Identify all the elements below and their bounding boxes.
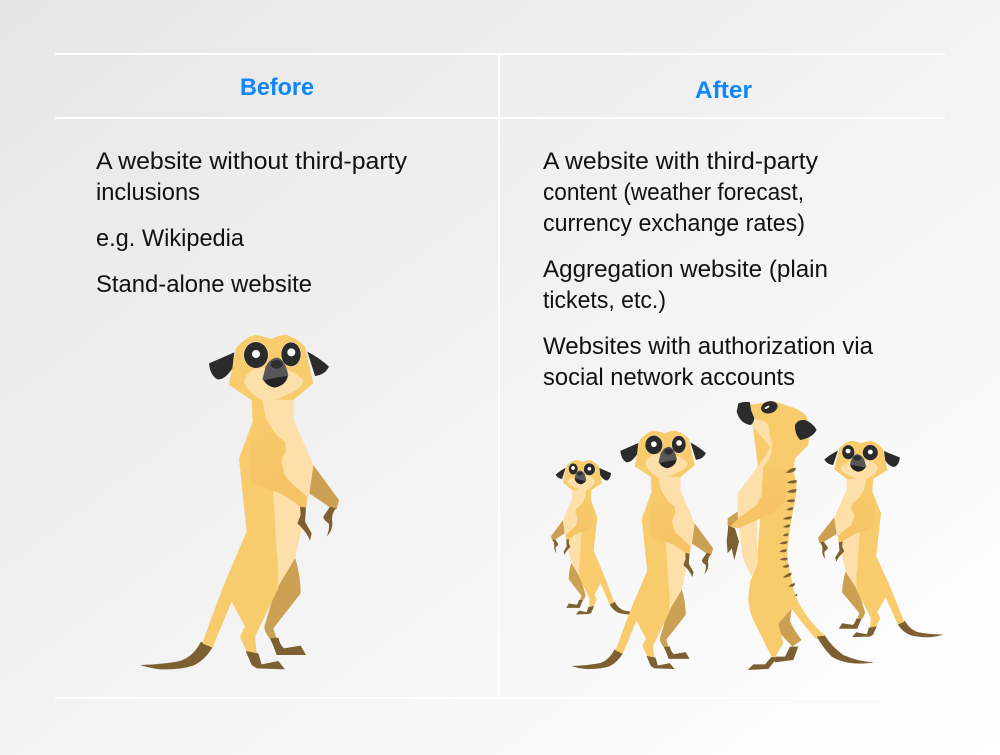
text block: after description [543, 148, 874, 391]
icon: small meerkat [551, 460, 643, 615]
text block: before description: Stand-alone website [96, 271, 312, 298]
text block: before description: A website without third-party [96, 148, 407, 175]
text block: after description: currency exchange rates) [543, 210, 805, 237]
text block: after description: A website with third-party [543, 148, 818, 175]
back stripes [779, 468, 797, 596]
heading: Before: Before [240, 74, 314, 101]
text block: after description: Websites with authorization via [543, 333, 874, 360]
text block: before description: inclusions [96, 179, 200, 206]
text block: before description [96, 148, 407, 298]
icon: right meerkat [818, 441, 943, 637]
comparison table grid [55, 53, 945, 699]
icon: medium meerkat [571, 431, 713, 669]
text block: after description: content (weather forecast, [543, 179, 804, 206]
text block: after description: tickets, etc.) [543, 287, 666, 314]
icon: single meerkat [140, 335, 339, 669]
text block: after description: Aggregation website (plain [543, 256, 828, 283]
heading: After: After [695, 77, 752, 104]
text block: before description: e.g. Wikipedia [96, 225, 245, 252]
icon: tall meerkat looking up [727, 399, 874, 670]
text block: after description: social network accounts [543, 364, 795, 391]
